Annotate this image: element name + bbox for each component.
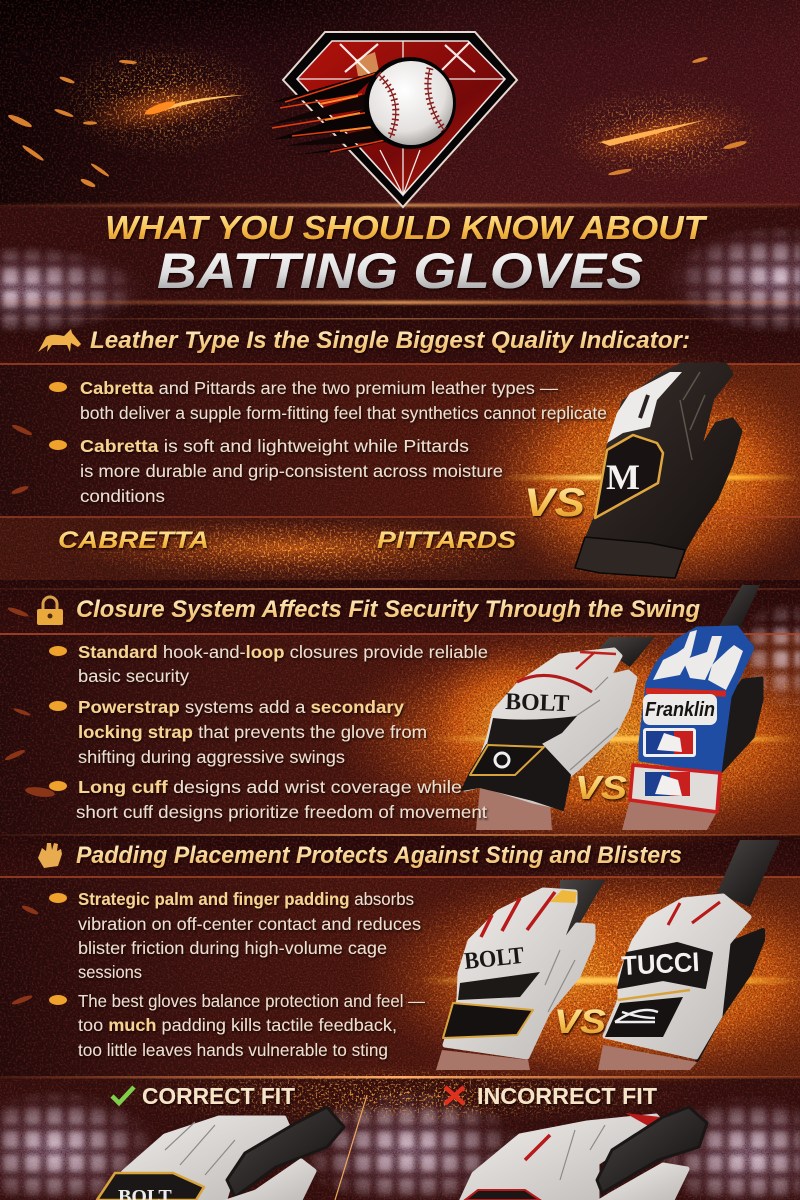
bullets: padding: vibration on off-center contact and reduces xyxy=(78,914,421,934)
label: cabretta: CABRETTA xyxy=(58,527,209,554)
glove: franklin blue: Franklin xyxy=(645,699,715,721)
glove: bolt padded xyxy=(436,880,605,1070)
divider spark xyxy=(335,1095,367,1200)
glove: tucci xyxy=(598,840,780,1070)
bullets: padding: too little leaves hands vulnerable to sting xyxy=(78,1040,388,1060)
icon: check xyxy=(112,1087,134,1103)
glove: bolt white: BOLT xyxy=(505,689,570,717)
logo: diamond with baseball xyxy=(268,32,517,207)
icon: horse xyxy=(38,329,81,352)
vs: VS xyxy=(575,769,627,806)
divider lines xyxy=(0,204,800,1078)
bullets: leather: is more durable and grip-consistent across moisture xyxy=(80,461,503,481)
icon: x xyxy=(445,1087,464,1104)
glove: bolt padded: BOLT xyxy=(463,943,525,975)
mlb patch xyxy=(643,728,696,757)
label: pittards: PITTARDS xyxy=(377,527,516,554)
baseball xyxy=(364,57,456,149)
bullets: leather: conditions xyxy=(80,486,165,506)
heading: padding: Padding Placement Protects Against Sting and Blisters xyxy=(76,842,682,869)
section 2: closure system xyxy=(37,585,762,830)
glove: bolt white xyxy=(462,637,655,830)
section 3: padding placement xyxy=(38,840,780,1070)
bullets: closure: short cuff designs prioritize freedom of movement xyxy=(76,802,487,822)
section 1: leather type xyxy=(38,327,740,578)
glove: black marucci xyxy=(575,365,740,578)
glove: tucci: TUCCI xyxy=(621,947,700,981)
bullets: closure: basic security xyxy=(78,666,189,686)
bullets: leather: both deliver a supple form-fitting feel that synthetics cannot replicate xyxy=(80,403,607,423)
bullets: padding: sessions xyxy=(78,962,142,982)
glove: correct fit xyxy=(97,1107,344,1200)
label: correct fit: CORRECT FIT xyxy=(142,1083,295,1109)
title xyxy=(105,209,708,299)
bullets: padding: blister friction during high-volume cage xyxy=(78,938,387,958)
bullets: closure: Long cuff designs add wrist coverage while xyxy=(78,777,462,797)
bullets: padding: The best gloves balance protection and feel — xyxy=(78,991,425,1011)
bullets: padding: too much padding kills tactile feedback, xyxy=(78,1015,397,1035)
glove: incorrect fit xyxy=(461,1107,707,1200)
glove: franklin blue xyxy=(622,585,762,830)
bullets: padding xyxy=(49,889,425,1060)
heading: leather type: Leather Type Is the Single Biggest Quality Indicator: xyxy=(90,327,690,354)
bullets: closure: Standard hook-and-loop closures provide reliable xyxy=(78,642,488,662)
bullets: closure: locking strap that prevents the glove from xyxy=(78,722,427,742)
label: incorrect fit: INCORRECT FIT xyxy=(477,1083,657,1109)
icon: hand xyxy=(38,843,62,868)
mlb strap patch xyxy=(645,772,690,796)
bullets: leather xyxy=(49,378,607,506)
title: BATTING GLOVES xyxy=(157,243,643,299)
vs: VS xyxy=(554,1003,606,1041)
section 4: fit comparison xyxy=(97,1083,707,1200)
bullets: leather: Cabretta is soft and lightweight while Pittards xyxy=(80,436,469,456)
diamond xyxy=(283,32,517,207)
glove: black marucci: M xyxy=(606,457,640,497)
bullets: leather: Cabretta and Pittards are the two premium leather types — xyxy=(80,378,559,398)
bullets: padding: Strategic palm and finger padding absorbs xyxy=(78,889,414,909)
heading: closure: Closure System Affects Fit Security Through the Swing xyxy=(76,596,700,623)
bullets: closure xyxy=(49,642,488,822)
speed streaks xyxy=(268,70,390,155)
title: WHAT YOU SHOULD KNOW ABOUT xyxy=(105,209,708,246)
bullets: closure: Powerstrap systems add a secondary xyxy=(78,697,404,717)
vs: VS xyxy=(524,481,585,525)
spark flecks xyxy=(4,56,747,1006)
bullets: closure: shifting during aggressive swings xyxy=(78,747,345,767)
icon: lock xyxy=(37,597,63,625)
